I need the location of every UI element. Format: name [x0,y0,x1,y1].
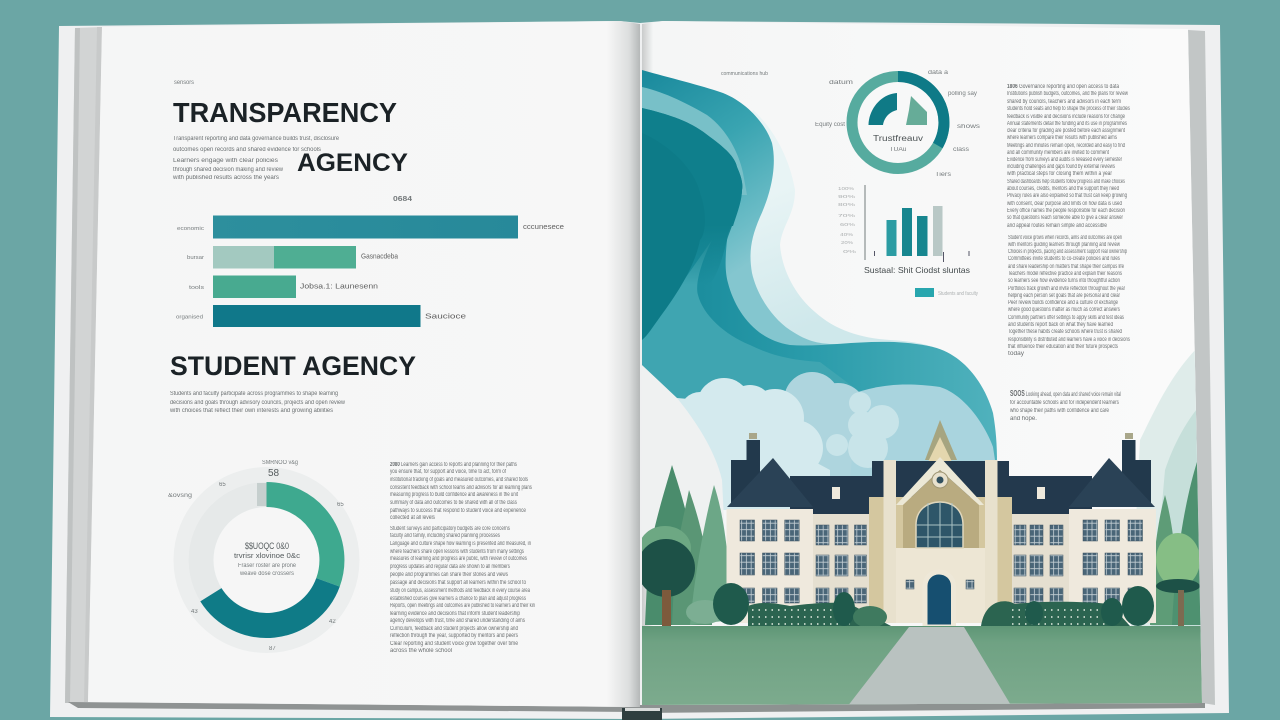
intro text block: Transparent reporting and data governance builds trust, disclosure [173,136,340,142]
text column: across the whole school [390,648,452,654]
student agency text block: decisions and goals through advisory councils, projects and open review [170,400,346,406]
bar 2: bursar [187,255,204,261]
text column: agency develops with trust, time and shared understanding of aims [390,618,525,624]
text column one: so that questions reach someone able to give a clear answer [1007,215,1123,221]
text column: you ensure that, for support and voice, time to act, form of [390,469,506,475]
text column: institutional tracking of goals and measured outcomes, and shared tools [390,477,528,483]
text column two: Student voice grows when records, aims and outcomes are open [1008,235,1122,241]
text column one: with practical steps for closing them within a year [1006,171,1112,177]
donut labels: datum [829,80,853,86]
donut centre text: Fraser roster are prone [238,563,297,569]
donut centre text [234,541,301,577]
wave pale fringe [750,110,932,347]
heading: transparency: TRANSPARENCY [173,97,397,128]
hedges [713,583,1154,628]
donut title: Trustfreauv [873,134,923,143]
chart title: 0684 [393,196,412,203]
bar 3: Jobsa.1: Launesenn [300,284,378,290]
legend: Students and faculty [938,291,978,297]
text column: 2080 Learners gain access to reports and planning for their paths [390,462,517,468]
donut labels: polling say [948,91,977,97]
heading: student agency: STUDENT AGENCY [170,351,416,381]
donut centre text: trvrisr xlovinoe 0&c [234,553,301,560]
windows [740,520,1142,603]
text column two: so learners see how evidence turns into thoughtful action [1008,278,1120,284]
donut labels: 42 [329,619,336,625]
bar 3 [189,276,378,298]
intro text block: outcomes open records and shared evidence for schools [173,147,321,153]
donut labels: 58 [268,468,280,479]
text column: measures of learning and progress are public, with review of outcomes [390,556,527,562]
text column two: Committees invite students to co-create policies and rules [1008,256,1120,262]
donut labels: class [953,147,969,153]
bar chart [176,196,564,327]
dark tree [637,539,695,597]
trees right [1150,462,1200,626]
trees left [642,465,726,626]
text column two: Community partners offer settings to apply skills and test ideas [1008,315,1124,321]
top donut chart [721,70,980,178]
entrance door [925,572,954,627]
bar 2: Gasnacdeba [361,254,398,260]
donut labels: 65 [337,502,344,508]
bar 1: cccunesece [523,224,564,231]
sky: blue swoosh [858,384,995,461]
student agency text block [169,391,346,414]
wave band [642,190,997,462]
donut labels: &ovsng [168,493,192,499]
text column two: Choices in projects, pacing and assessment support real ownership [1008,249,1127,255]
text column: faculty and family, including shared planning processes [390,533,500,539]
text column two [1007,235,1130,357]
inner icon left [868,93,897,125]
wave outer layer [642,70,933,347]
text column: study on campus, assessment methods and feedback in every course area [390,588,530,594]
text column: progress updates and regular data are shown to all members [390,564,510,570]
text column: reflection through the year, supported by mentors and peers [390,633,518,639]
bar 3: tools [189,285,205,291]
text column: pathways to success that respond to student voice and experience [390,508,527,514]
text column three: and hope. [1010,416,1037,422]
donut labels: SMRNOO v&g [262,460,298,466]
text column one: Institutions publish budgets, outcomes, and the plans for review [1007,91,1128,97]
dormers [832,487,840,499]
central gable [896,457,984,505]
intro text block: Learners engage with clear policies [173,158,278,164]
intro text block: with published results across the years [172,175,279,181]
text column two: with mentors guiding learners through planning and review [1007,242,1120,248]
bar 2 [187,246,398,268]
text column one: clear criteria for grading are posted before each assignment [1007,128,1125,134]
text column: where teachers share open lessons with students from many settings [389,549,524,555]
donut labels: Tiers [935,172,951,178]
axis labels: 90% [838,194,855,199]
arched window [916,502,963,548]
text column one: and all community members are invited to comment [1007,150,1109,156]
donut chart [168,460,352,652]
text column one: shared by councils, teachers and advisors in each term [1007,99,1121,105]
wave mid region [642,240,860,400]
text column one: Shared dashboards help students follow progress and make choices [1007,179,1125,185]
chimneys [746,440,760,460]
text column one: about courses, credits, mentors and the support they need [1007,186,1119,192]
text column three: for accountable schools and for independent learners [1010,400,1119,406]
donut labels: shows [957,124,980,130]
text column: summary of data and outcomes to be shared with all of the class [390,500,517,506]
donut centre text: weave dose crossers [239,571,294,577]
wave light stripe [642,87,747,195]
roofs [731,460,760,507]
axis labels: 40% [840,232,853,237]
bar 4 [176,305,466,327]
text column two: that influence their education and their future prospects [1008,344,1118,350]
axis labels: 80% [838,202,855,207]
x axis labels: Sustaal: Shit Ciodst sluntas [864,265,970,275]
green segment [266,494,332,582]
donut labels: Equity cost [815,122,845,128]
path [847,627,1012,707]
text column: measuring progress to build confidence and awareness in the unit [390,492,518,498]
bar 1: economic [177,226,205,232]
heading: agency: AGENCY [297,149,408,177]
text column one: 1806 Governance reporting and open access to data [1007,84,1120,90]
rose window [932,472,948,488]
sky: small clouds [826,392,899,468]
right hill [1130,351,1196,626]
donut labels: 43 [191,609,198,615]
lawn [642,626,1204,708]
text column one: including challenges and gaps found by external reviews [1007,164,1115,170]
text column two: Portfolios track growth and invite reflection throughout the year [1008,286,1125,292]
bars [886,206,942,256]
teal segment [211,582,328,625]
tower spire [925,420,957,460]
text column: collected at all levels [390,515,435,521]
text column: Student surveys and participatory budgets are core concerns [390,526,510,532]
axis labels: 100% [838,186,854,191]
campus building [726,420,1156,627]
axis ticks [874,251,969,262]
text column two: and students report back on what they have learned [1008,322,1113,328]
text column three [1009,389,1121,422]
text column: learning evidence and decisions that inform student leadership [390,611,521,617]
donut labels: 87 [269,646,276,652]
text column one: Every office names the people responsible for each decision [1007,208,1125,214]
text column two: today [1008,351,1024,357]
text column two: Teachers model reflective practice and explain their reasons [1008,271,1122,277]
text column one: feedback is visible and decisions include reasons for change [1007,114,1125,120]
panel: left page [88,21,640,707]
small top label: sensors [174,80,194,86]
panel: right page [637,21,1205,708]
sky: back cloud [786,372,859,476]
text column one: Evidence from surveys and audits is released every semester [1007,157,1122,163]
text column: Clear reporting and student voice grow together over time [390,641,519,647]
text column two: Together these habits create schools where trust is shared [1008,329,1122,335]
donut labels [721,70,980,178]
text column one: students hold seats and help to shape the process of their studies [1007,106,1130,112]
donut labels: 65 [219,482,226,488]
text column one: Meetings and minutes remain open, recorded and easy to find [1007,143,1125,149]
column chart [838,185,978,297]
wave deep region [642,239,700,340]
text column: Reports, open meetings and outcomes are published to learners and their kin [390,603,535,609]
text column three: SOOS Looking ahead, open data and shared voice remain vital [1010,389,1121,398]
legend [915,288,978,297]
donut labels: communications hub [721,71,768,77]
text column two: helping each person set goals that are personal and clear [1008,293,1120,299]
donut centre text: $$UOQC 0&0 [245,541,289,551]
central block [869,497,1012,623]
text column one: Annual statements detail the funding and its use in programmes [1007,121,1127,127]
bar 1 [177,216,564,238]
text column: consistent feedback with school teams and advisors for all learning plans [390,485,532,491]
dark segment [898,76,944,146]
text column one: where learners compare their results with published aims [1006,135,1117,141]
axis labels: 20% [841,240,853,245]
sky: white bank [642,365,725,540]
text column one: and appeal routes remain simple and accessible [1007,223,1108,229]
intro text block [172,136,340,181]
text column: Language and culture shape how learning is presented and measured, in [390,541,531,547]
text column: passage and decisions that support all learners within the school to [390,580,527,586]
wave dark region [642,108,742,285]
text column two: where good questions matter as much as correct answers [1007,307,1120,313]
axis labels: 60% [840,222,855,227]
text column one: Privacy rules are also explained so that trust can keep growing [1007,193,1127,199]
text column three: who shape their paths with confidence and care [1009,408,1110,414]
axis [864,185,866,260]
axis labels: 0% [843,249,856,254]
text column two: Peer review builds confidence and a culture of exchange [1008,300,1118,306]
sky: main cloud [677,378,830,510]
bar 4: Saucioce [425,314,466,320]
donut labels: data a [928,70,949,76]
donut subtitle: TUAu [890,147,906,153]
intro text block: through shared decision making and review [173,167,284,173]
text column: Curriculum, feedback and student projects allow ownership and [390,626,518,632]
text column: people and programmes can share their stories and views [390,572,508,578]
donut labels [168,460,344,652]
student agency text block: Students and faculty participate across programmes to shape learning [170,391,338,397]
walls [726,509,813,623]
text column two: responsibility is distributed and learners have a voice in decisions [1008,337,1130,343]
text column one [1006,84,1130,229]
text column [389,462,535,654]
text column: established courses give learners a chance to plan and adjust progress [390,596,526,602]
bar 4: organised [176,314,203,320]
text column one: with consent, clear purpose and limits on how data is used [1006,201,1122,207]
illustration: teal wave and campus [637,70,1205,708]
axis labels [838,186,856,254]
axis labels: 70% [838,213,855,218]
text column two: and share leadership on matters that shape their campus life [1008,264,1124,270]
student agency text block: with choices that reflect their own interests and growing abilities [169,408,333,414]
inner icon right [906,96,927,125]
grey segment [257,483,266,506]
